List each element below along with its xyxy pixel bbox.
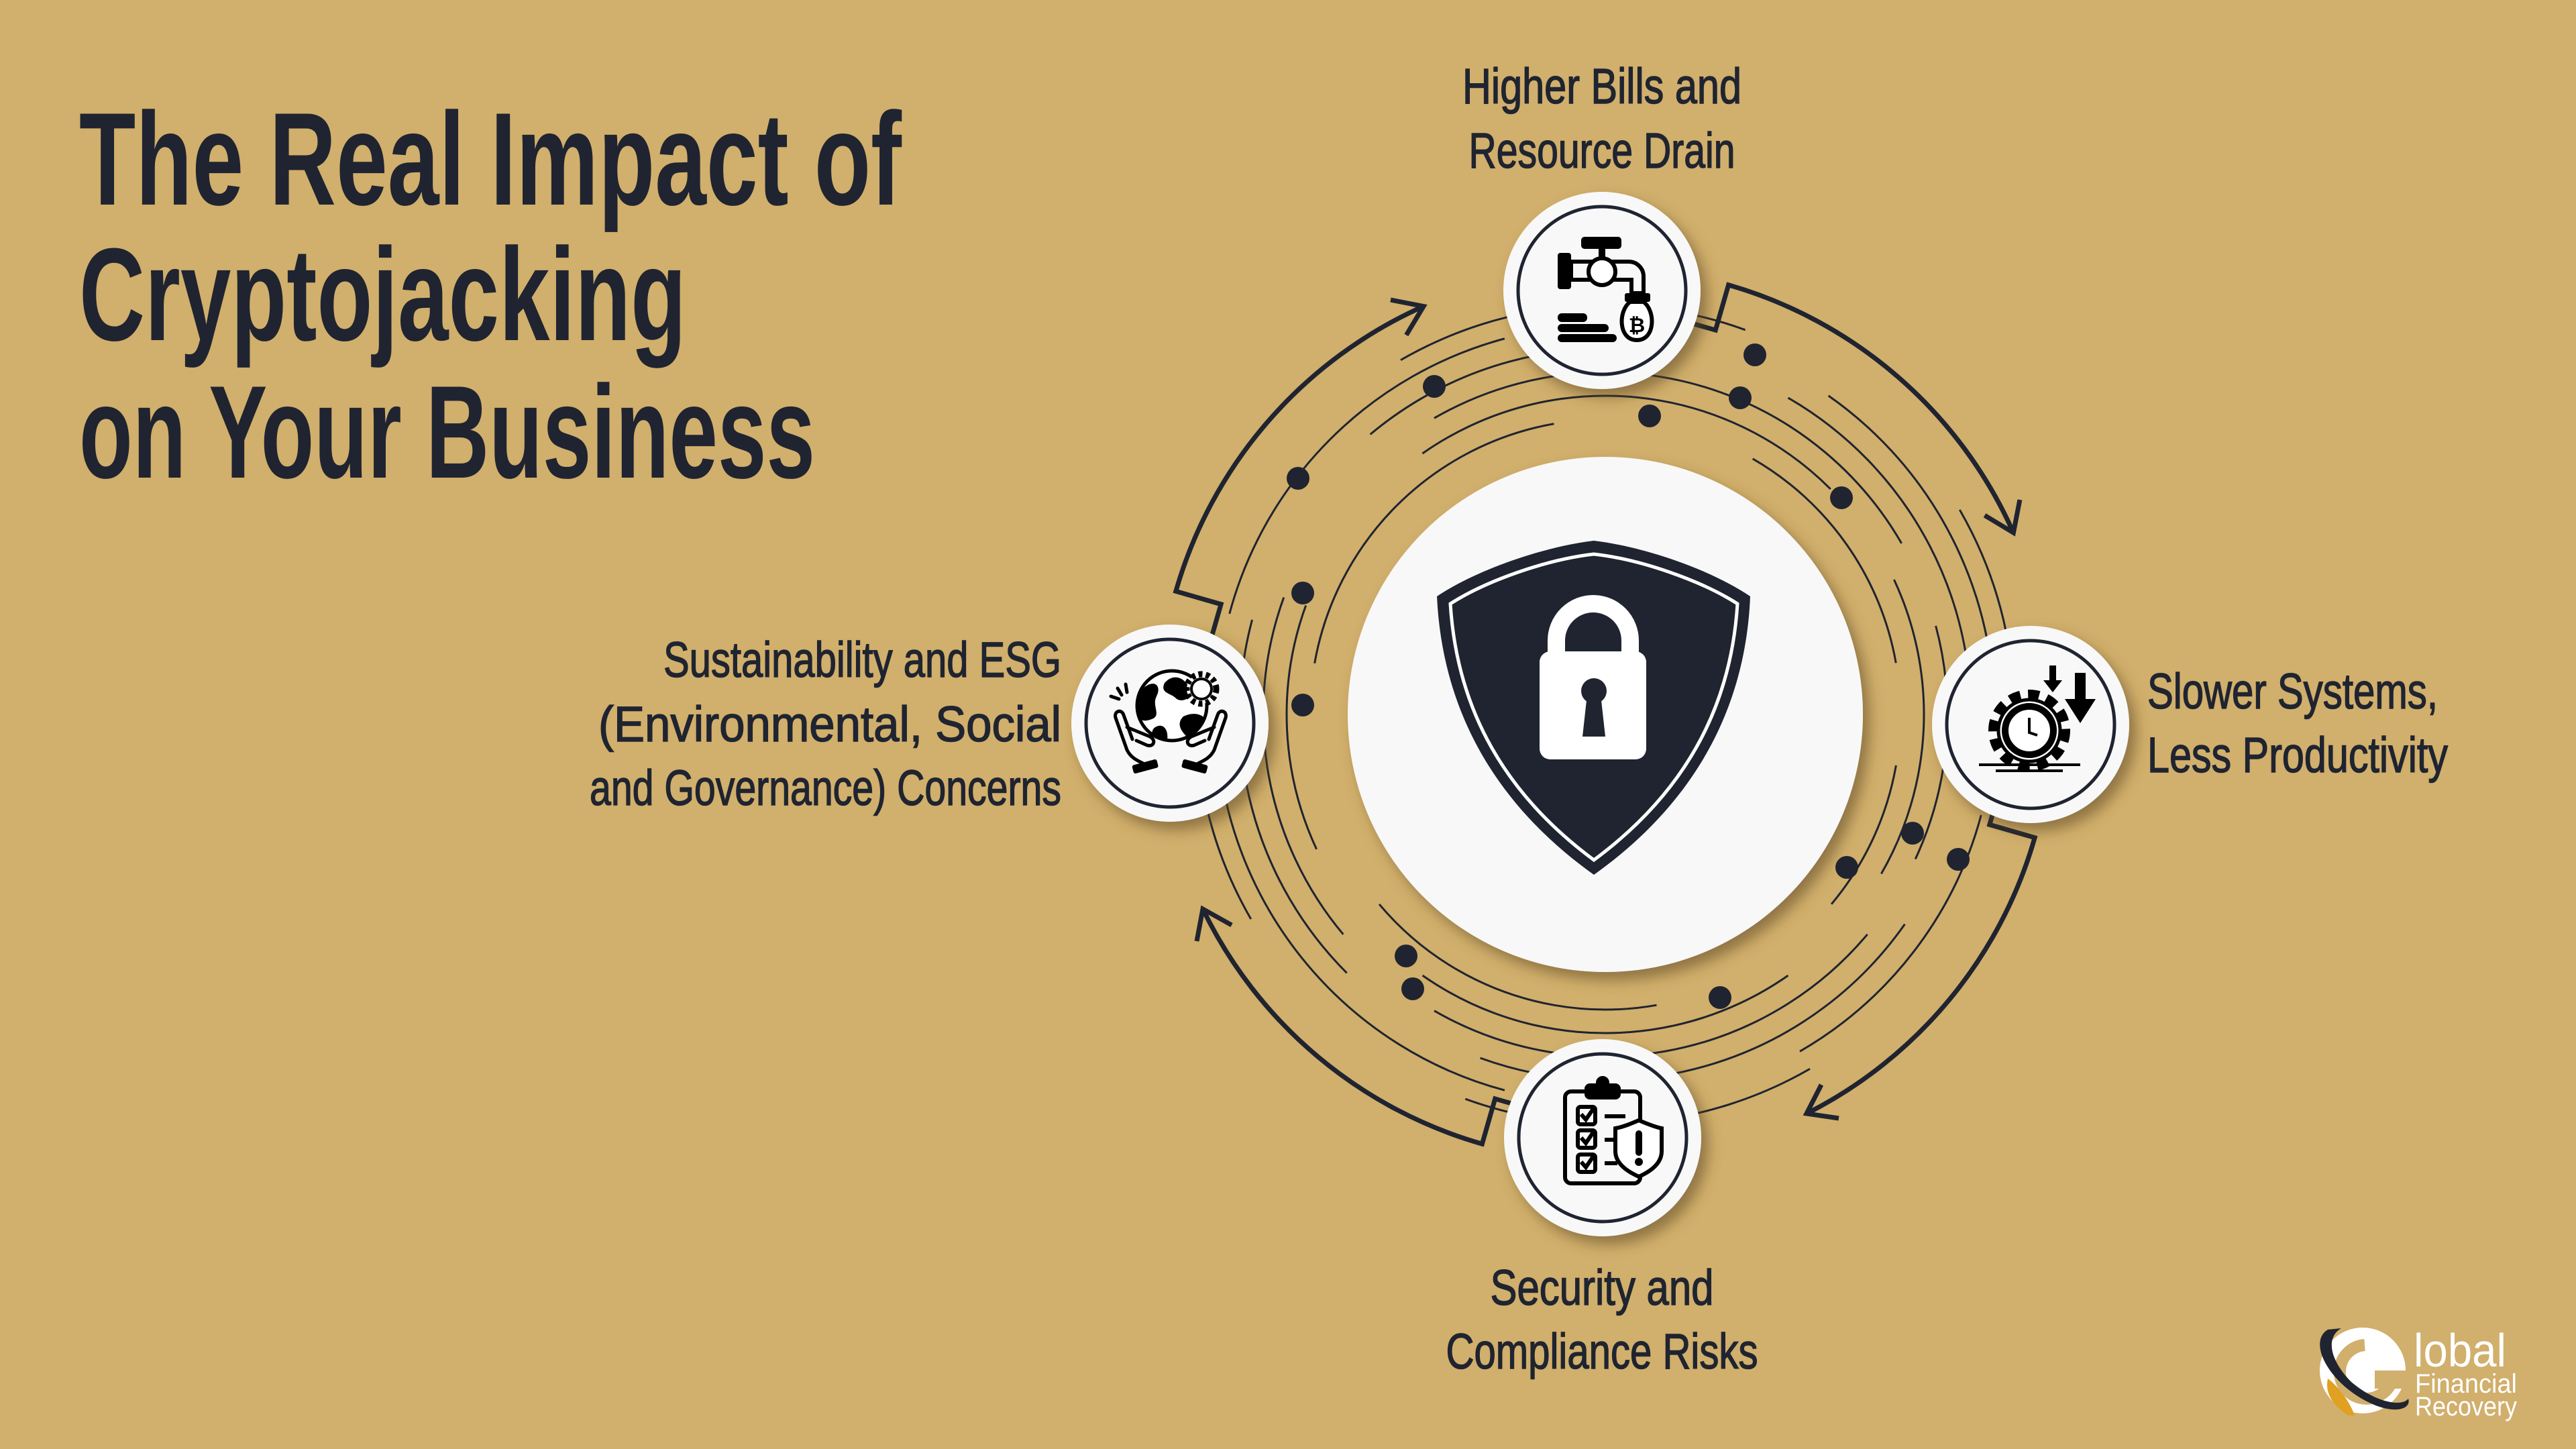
label: sustainability: and Governance) Concerns [590, 760, 1061, 816]
label: slower systems: Less Productivity [2147, 727, 2448, 783]
icon: faucet with coins and bitcoin bag: ₿ [1629, 315, 1645, 337]
label: slower systems: Slower Systems, [2147, 663, 2438, 719]
title: on Your Business [79, 358, 815, 506]
logo: Financial [2415, 1369, 2517, 1399]
label: sustainability [590, 632, 1061, 816]
label: slower systems [2147, 663, 2448, 783]
icon: gear clock with down arrows [1979, 665, 2096, 772]
label: security [1446, 1260, 1758, 1379]
title: Cryptojacking [79, 221, 686, 368]
logo [2320, 1324, 2517, 1421]
title: The Real Impact of [79, 85, 902, 233]
label: sustainability: (Environmental, Social [598, 696, 1061, 752]
logo: lobal [2414, 1324, 2506, 1377]
label: security: Compliance Risks [1446, 1324, 1758, 1379]
concentric arcs with dots [1046, 156, 2164, 1273]
center circle with shield [1348, 457, 1863, 972]
node: top - bills [1503, 192, 1701, 389]
icon: clipboard checklist with shield [1565, 1078, 1662, 1183]
node: right - slower systems [1932, 626, 2129, 823]
label: higher bills [1462, 58, 1741, 178]
label: higher bills: Resource Drain [1469, 123, 1735, 178]
label: security: Security and [1491, 1260, 1713, 1316]
node: left - sustainability [1071, 625, 1269, 822]
logo: Recovery [2415, 1392, 2517, 1421]
title [79, 85, 902, 506]
cycle arrows [1176, 285, 2035, 1144]
icon: shield with padlock [1437, 541, 1750, 875]
icon: globe with gear held by hands [1111, 671, 1226, 774]
node: bottom - security [1504, 1039, 1701, 1236]
label: higher bills: Higher Bills and [1462, 58, 1741, 114]
icon: faucet with coins and bitcoin bag [1558, 237, 1652, 342]
label: sustainability: Sustainability and ESG [663, 632, 1061, 688]
